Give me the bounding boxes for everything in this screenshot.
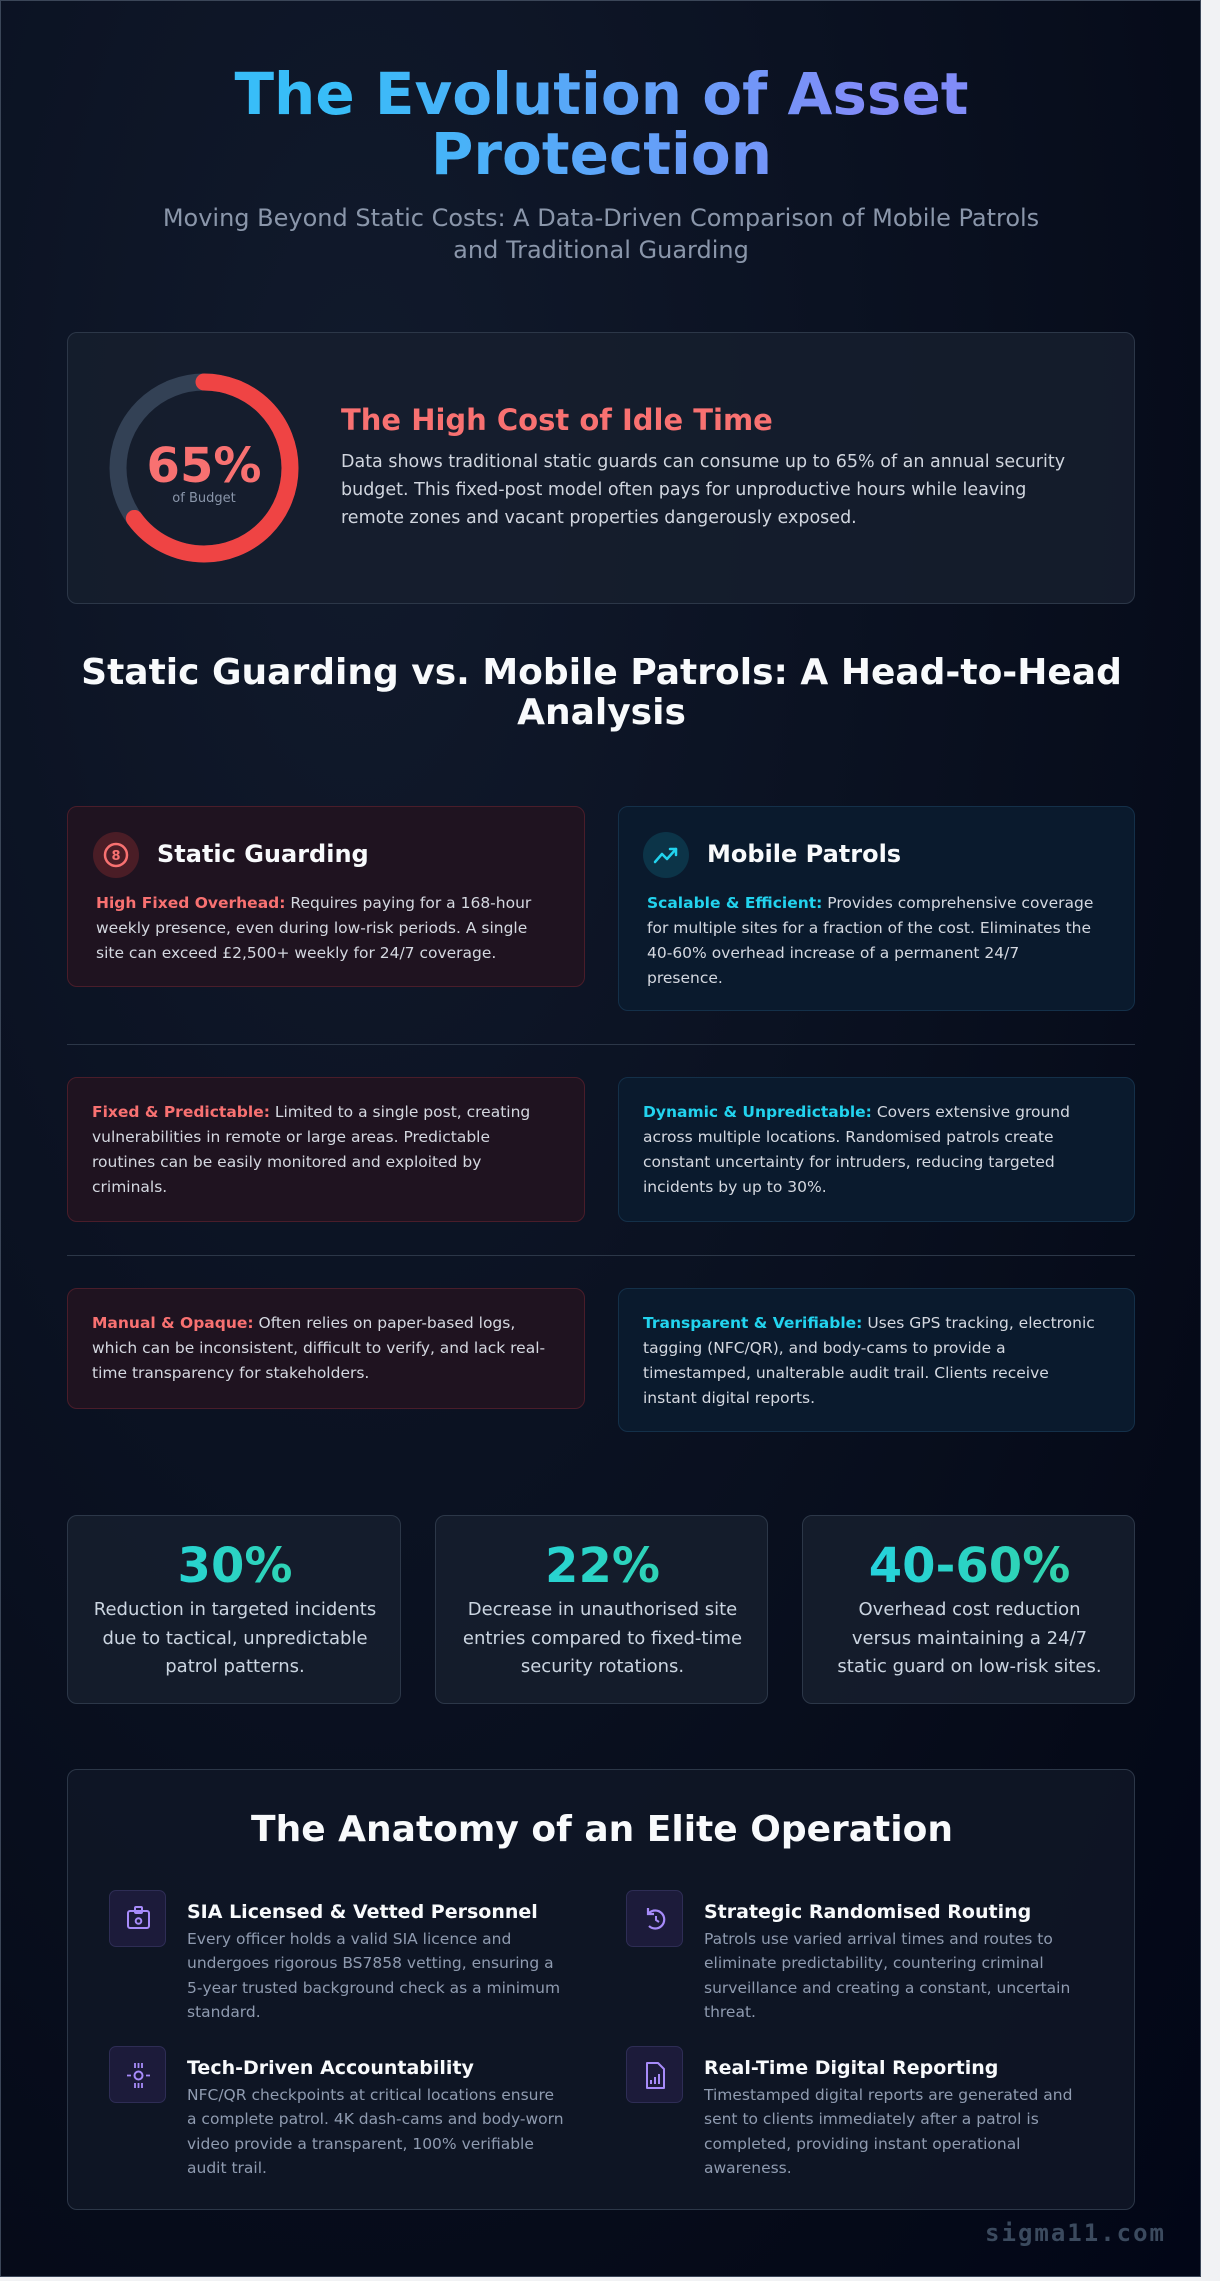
panel: transparent & verifiable: Transparent & Verifiable: Uses GPS tracking, electronic tagging (NFC/QR), and body-cams to provide a timestamped, unalterable audit trail. Clients receive instant digital reports. xyxy=(643,1314,1095,1407)
item: strategic routing: Strategic Randomised Routing xyxy=(704,1901,1031,1923)
item: real-time reporting: Real-Time Digital Reporting xyxy=(704,2057,998,2079)
item: SIA licensed: SIA Licensed & Vetted Personnel xyxy=(187,1901,538,1923)
stat: 22% xyxy=(435,1515,768,1704)
text: High Fixed Overhead: Requires paying for a 168-hour weekly presence, even during low-risk periods. A single site can exceed £2,500+ weekly for 24/7 coverage. xyxy=(96,894,531,962)
heading: Static Guarding xyxy=(157,840,369,868)
heading: Mobile Patrols xyxy=(707,840,901,868)
panel: manual & opaque xyxy=(67,1288,585,1409)
icon: coin: 8 xyxy=(111,849,121,864)
panel: fixed & predictable: Fixed & Predictable: Limited to a single post, creating vulnerabilities in remote or large areas. Predictable routines can be easily monitored and exploited by criminals. xyxy=(92,1103,530,1196)
stat: 30%: 30% xyxy=(178,1538,292,1594)
subtitle: Moving Beyond Static Costs: A Data-Driven Comparison of Mobile Patrols and Traditional Guarding xyxy=(163,204,1039,264)
item: tech-driven accountability: NFC/QR checkpoints at critical locations ensure a complete patrol. 4K dash-cams and body-worn video provide a transparent, 100% verifiable audit trail. xyxy=(187,2086,564,2177)
panel: dynamic & unpredictable: Dynamic & Unpredictable: Covers extensive ground across multiple locations. Randomised patrols create constant uncertainty for intruders, reducing targeted incidents by up to 30%. xyxy=(643,1103,1070,1196)
item: SIA licensed: Every officer holds a valid SIA licence and undergoes rigorous BS7858 vetting, ensuring a 5‑year trusted background check as a minimum standard. xyxy=(187,1930,560,2021)
item: strategic routing xyxy=(626,1890,1070,2021)
icon: scan xyxy=(109,2046,166,2103)
stat: 30%: Reduction in targeted incidents due to tactical, unpredictable patrol patterns. xyxy=(94,1599,376,1677)
heading: The Anatomy of an Elite Operation xyxy=(251,1809,953,1850)
panel: fixed & predictable xyxy=(67,1077,585,1222)
panel: manual & opaque: Manual & Opaque: Often relies on paper-based logs, which can be inconsistent, difficult to verify, and lack real-time transparency for stakeholders. xyxy=(92,1314,545,1382)
item: real-time reporting xyxy=(626,2046,1072,2177)
stat: 40-60% xyxy=(802,1515,1135,1704)
panel: high cost of idle time xyxy=(67,332,1135,604)
panel: static guarding xyxy=(67,806,585,987)
panel: dynamic & unpredictable xyxy=(618,1077,1135,1222)
panel: transparent & verifiable xyxy=(618,1288,1135,1432)
item: tech-driven accountability xyxy=(109,2046,564,2177)
icon: document chart xyxy=(626,2046,683,2103)
stat: 22%: Decrease in unauthorised site entries compared to fixed-time security rotations. xyxy=(463,1599,742,1677)
title xyxy=(234,60,969,188)
text block: Data shows traditional static guards can consume up to 65% of an annual security budget. This fixed-post model often pays for unproductive hours while leaving remote zones and vacant properties dangerously exposed. xyxy=(341,452,1065,528)
item: tech-driven accountability: Tech-Driven Accountability xyxy=(187,2057,474,2079)
stat: 40-60%: Overhead cost reduction versus maintaining a 24/7 static guard on low-risk sites. xyxy=(837,1599,1102,1677)
donut chart 65%: of Budget xyxy=(172,491,236,506)
donut chart 65%: 65% xyxy=(147,438,261,494)
icon: coin xyxy=(93,832,139,878)
footer brand: sigma11.com xyxy=(985,2219,1166,2247)
heading: The High Cost of Idle Time xyxy=(341,403,773,437)
icon: rotate xyxy=(626,1890,683,1947)
donut chart 65% xyxy=(110,374,298,562)
item: SIA licensed xyxy=(109,1890,560,2021)
stat: 40-60%: 40-60% xyxy=(869,1538,1070,1594)
title: The Evolution of Asset xyxy=(234,60,969,128)
panel: anatomy of an elite operation xyxy=(67,1769,1135,2210)
panel: mobile patrols xyxy=(618,806,1135,1011)
title: Protection xyxy=(431,120,772,188)
stat: 22%: 22% xyxy=(545,1538,660,1594)
item: strategic routing: Patrols use varied arrival times and routes to eliminate predictability, countering criminal surveillance and creating a constant, uncertain threat. xyxy=(704,1930,1070,2021)
icon: badge xyxy=(109,1890,166,1947)
section heading: Static Guarding vs. Mobile Patrols: A Head-to-Head Analysis xyxy=(81,652,1122,733)
stat: 30% xyxy=(67,1515,401,1704)
item: real-time reporting: Timestamped digital reports are generated and sent to clients immediately after a patrol is completed, providing instant operational awareness. xyxy=(704,2086,1072,2177)
text: Scalable & Efficient: Provides comprehensive coverage for multiple sites for a fraction of the cost. Eliminates the 40-60% overhead increase of a permanent 24/7 presence. xyxy=(647,894,1093,987)
icon: trend xyxy=(643,832,689,878)
